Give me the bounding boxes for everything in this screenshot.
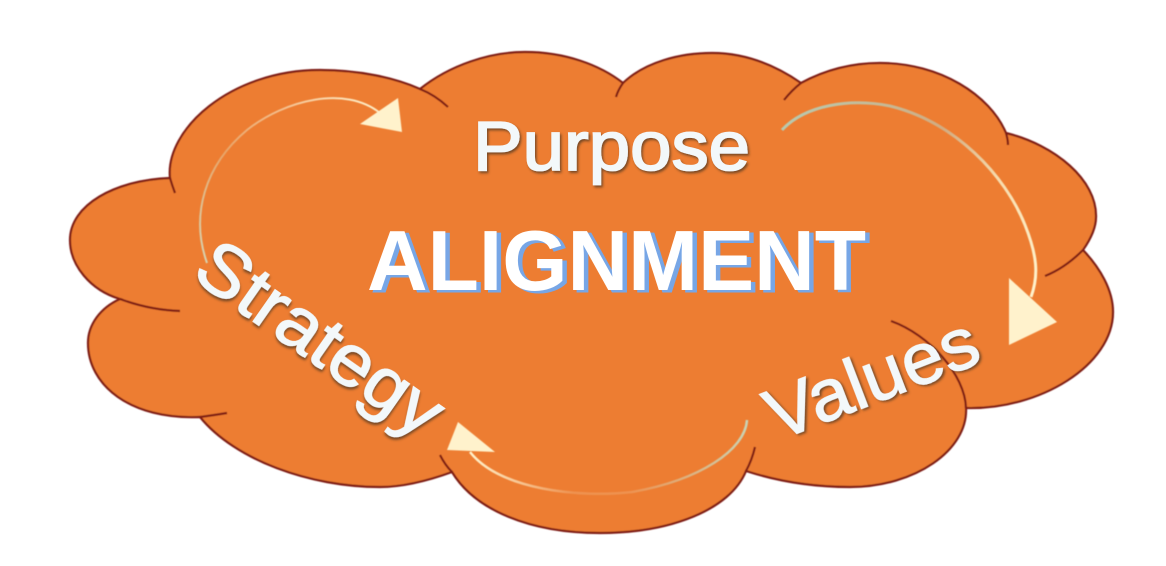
arrow: strategy to purpose xyxy=(200,98,402,263)
arrow: values to strategy xyxy=(447,420,747,494)
arrow: purpose to values xyxy=(782,103,1057,345)
title: alignment: ALIGNMENT xyxy=(367,214,866,309)
title: alignment: ALIGNMENT xyxy=(371,216,870,311)
label: strategy: Strategy xyxy=(181,225,459,453)
cloud inner creases xyxy=(120,83,1083,472)
heading: purpose: Purpose xyxy=(473,107,750,185)
cloud shape xyxy=(70,52,1113,533)
label: values: Values xyxy=(754,302,990,456)
cloud outline xyxy=(70,52,1113,533)
